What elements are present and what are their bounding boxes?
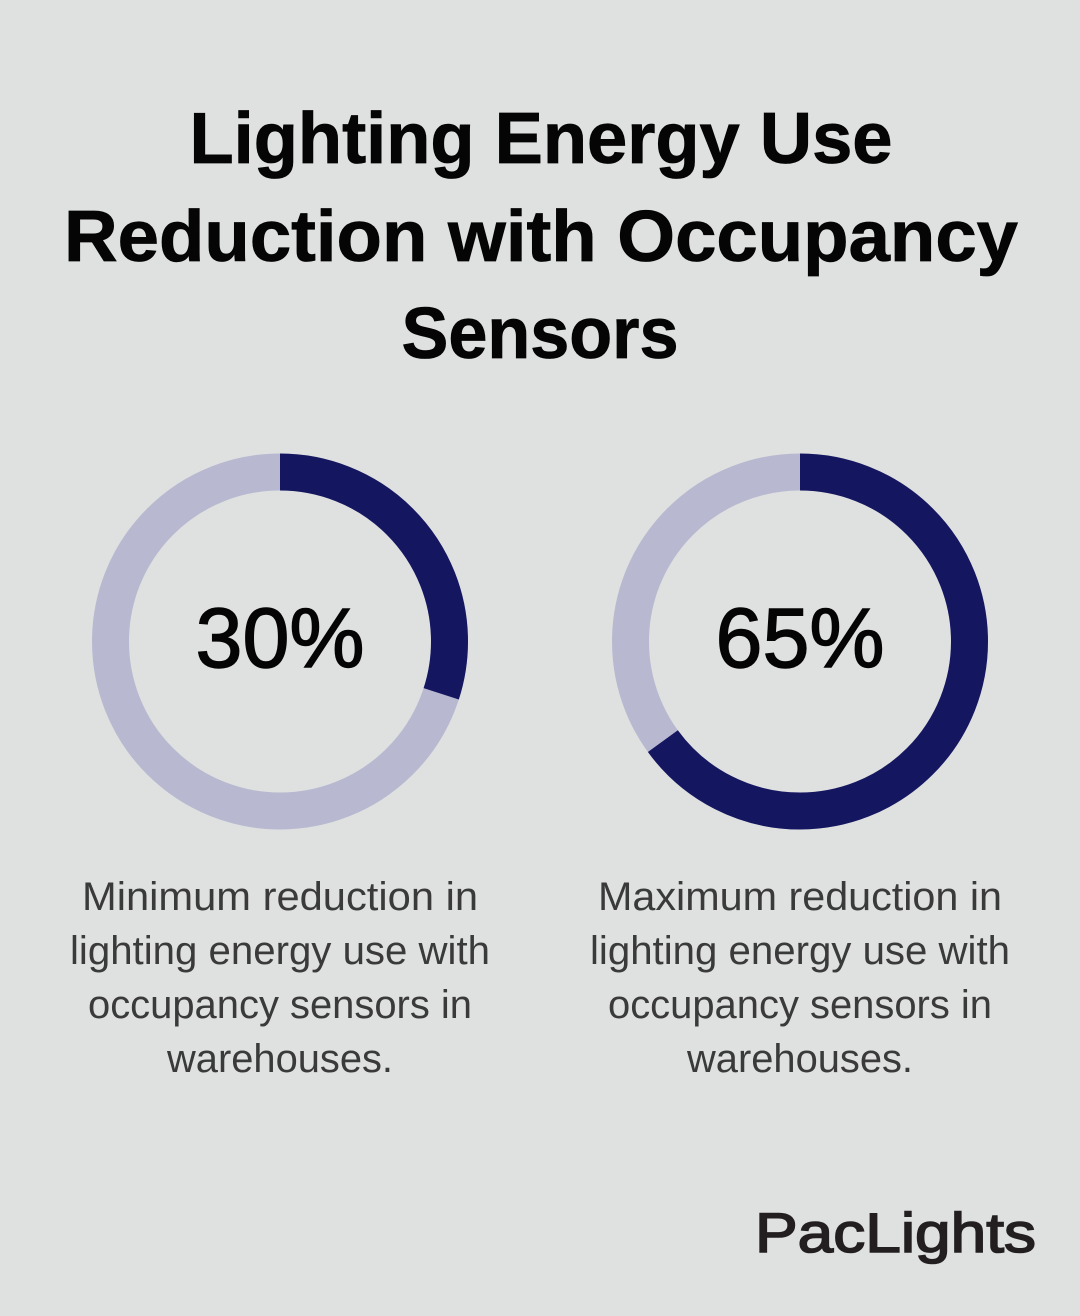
description: maximum: occupancy sensors in — [608, 983, 992, 1027]
description: maximum: Maximum reduction in — [598, 875, 1002, 919]
logo: PacLights: PacLights — [755, 1201, 1036, 1264]
donut chart: 65% — [630, 472, 970, 811]
value: 30%: 30% — [196, 591, 364, 685]
title: Lighting Energy Use — [190, 99, 892, 179]
panel: maximum reduction — [590, 472, 1010, 1081]
description: minimum — [70, 875, 490, 1081]
title: Reduction with Occupancy — [64, 197, 1018, 277]
description: minimum: lighting energy use with — [70, 929, 490, 973]
description: minimum: Minimum reduction in — [82, 875, 478, 919]
title — [64, 99, 1018, 374]
description: minimum: warehouses. — [166, 1037, 393, 1081]
panel: minimum reduction — [70, 472, 490, 1081]
description: maximum — [590, 875, 1010, 1081]
description: maximum: warehouses. — [686, 1037, 913, 1081]
description: minimum: occupancy sensors in — [88, 983, 472, 1027]
value: 65%: 65% — [716, 591, 884, 685]
description: maximum: lighting energy use with — [590, 929, 1010, 973]
donut chart: 30% — [110, 472, 450, 811]
title: Sensors — [402, 294, 678, 374]
